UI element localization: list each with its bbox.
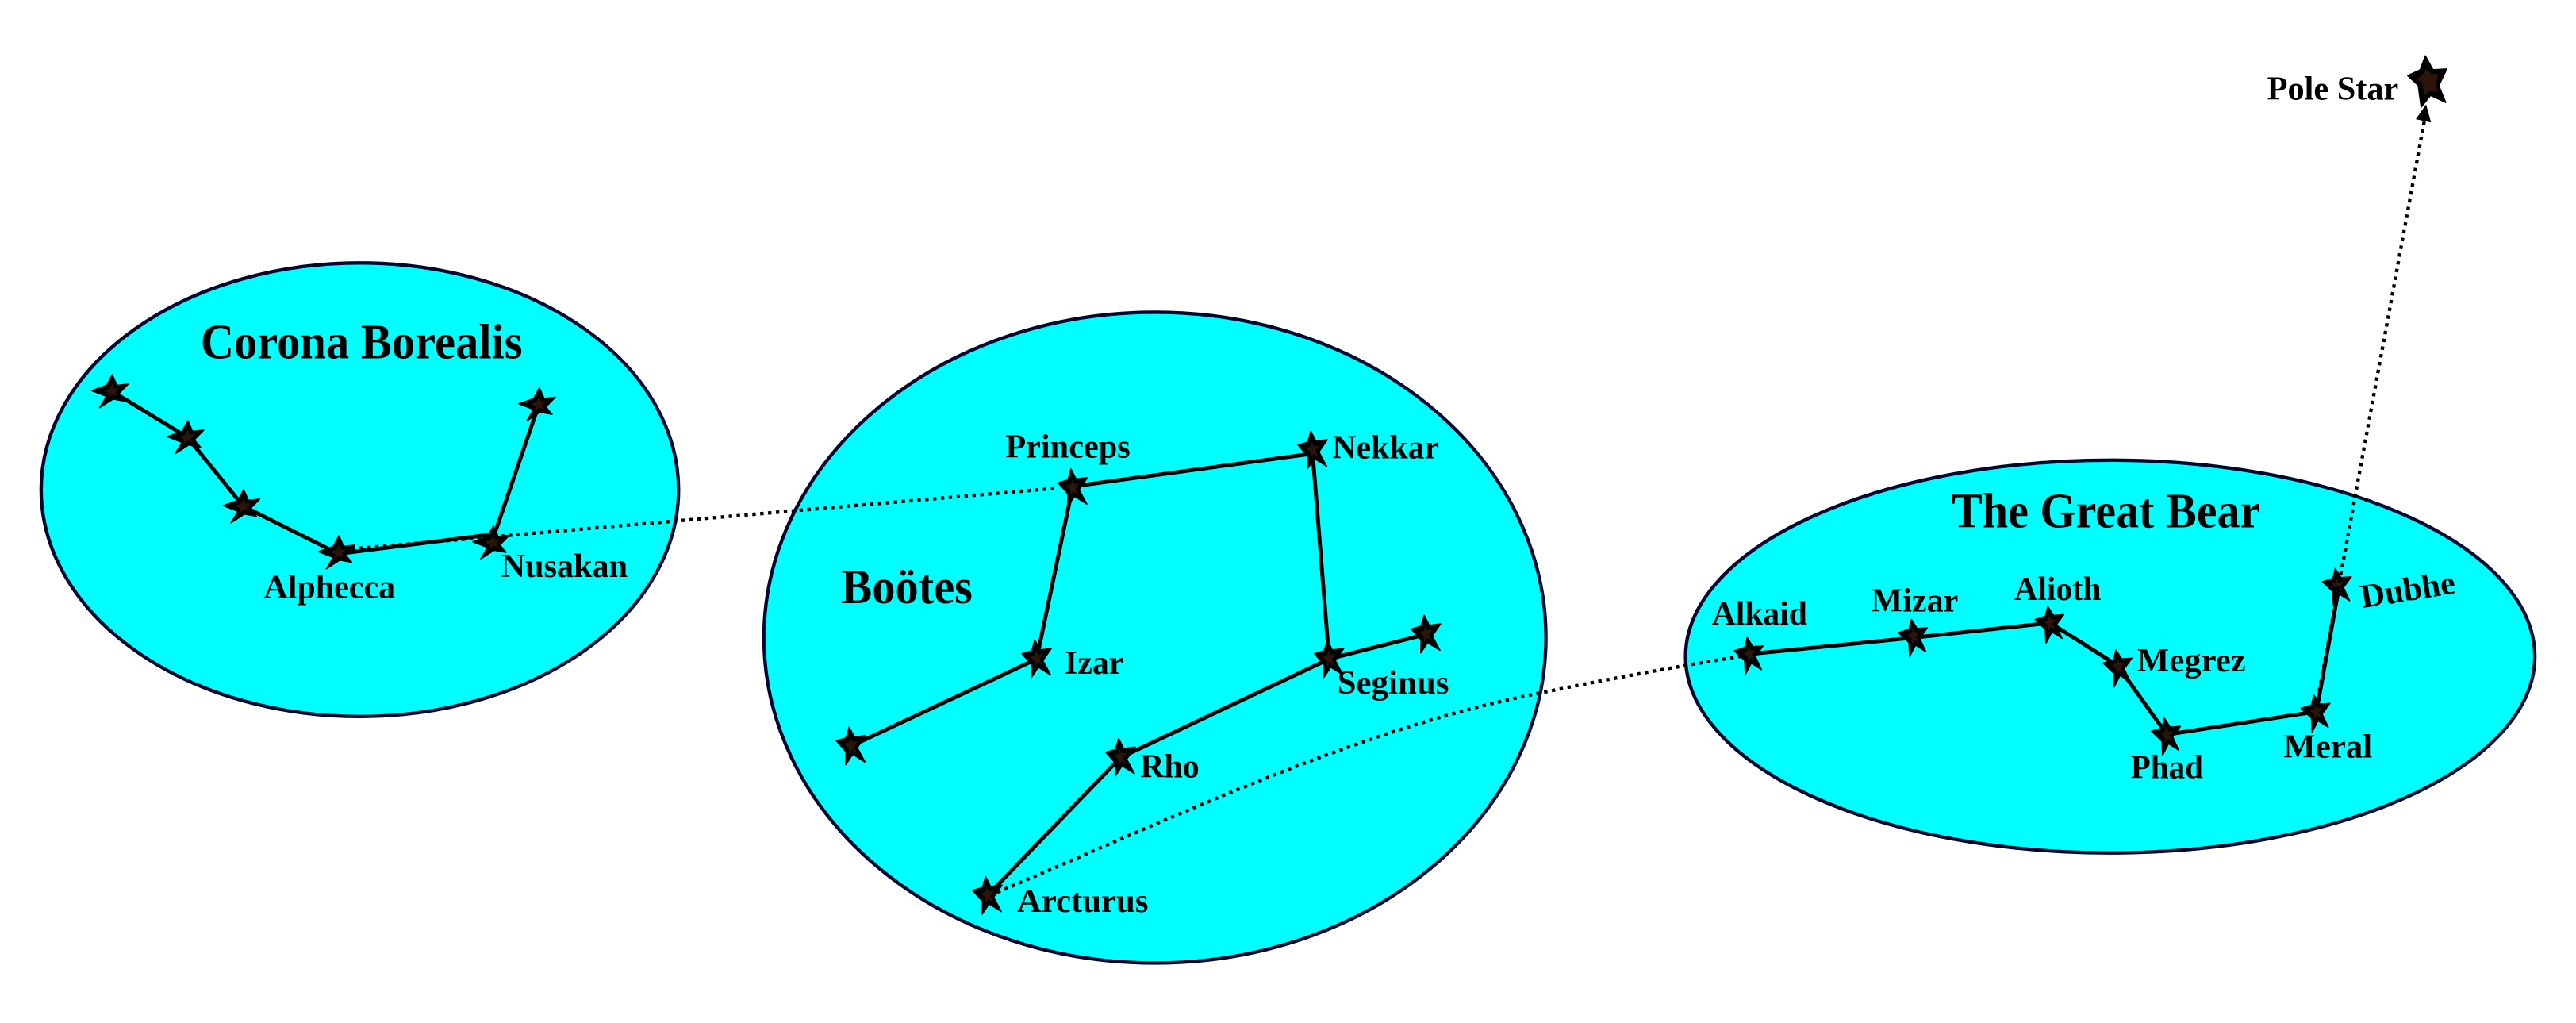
label: Alphecca: Alphecca (263, 569, 395, 606)
label: Megrez: Megrez (2137, 642, 2246, 679)
label: Princeps: Princeps (1005, 429, 1131, 466)
label: Pole Star: Pole Star (2267, 70, 2398, 107)
arrow: Meral through Dubhe to Pole Star (2317, 104, 2431, 706)
icon: Pole Star (2408, 56, 2447, 107)
panel: The Great Bear (1686, 460, 2535, 853)
constellation lines: The Great Bear (1749, 585, 2340, 735)
dotted line: Alphecca to Princeps (351, 488, 1058, 549)
constellation lines: Boötes lower (988, 659, 1329, 896)
heading: Boötes: Boötes (841, 560, 973, 614)
star group: The Great Bear (1734, 568, 2351, 755)
oval: Corona Borealis background (41, 263, 678, 717)
constellation lines: Corona Borealis (112, 391, 539, 554)
oval: Boötes background (764, 312, 1546, 963)
heading: Corona Borealis: Corona Borealis (201, 315, 523, 369)
label: Arcturus: Arcturus (1017, 883, 1148, 920)
label: Meral: Meral (2283, 729, 2372, 766)
constellation lines: Boötes upper (851, 454, 1426, 746)
label: Rho: Rho (1140, 748, 1200, 785)
panel: Corona Borealis (41, 263, 678, 717)
label: Alkaid: Alkaid (1712, 595, 1807, 633)
label: Nekkar: Nekkar (1332, 429, 1439, 467)
dotted line: Arcturus to Alkaid (997, 656, 1745, 892)
label: Dubhe: Dubhe (2358, 564, 2458, 616)
star group: Corona Borealis (92, 375, 555, 569)
label: Seginus: Seginus (1338, 664, 1449, 702)
label: Izar: Izar (1065, 644, 1123, 682)
label: Nusakan: Nusakan (501, 548, 628, 585)
heading: The Great Bear: The Great Bear (1952, 485, 2260, 539)
panel: Boötes (764, 312, 1546, 963)
label: Mizar: Mizar (1872, 582, 1958, 619)
label: Phad: Phad (2131, 748, 2203, 786)
star group: Boötes (836, 431, 1441, 914)
label: Alioth: Alioth (2014, 571, 2101, 608)
oval: The Great Bear background (1686, 460, 2535, 853)
